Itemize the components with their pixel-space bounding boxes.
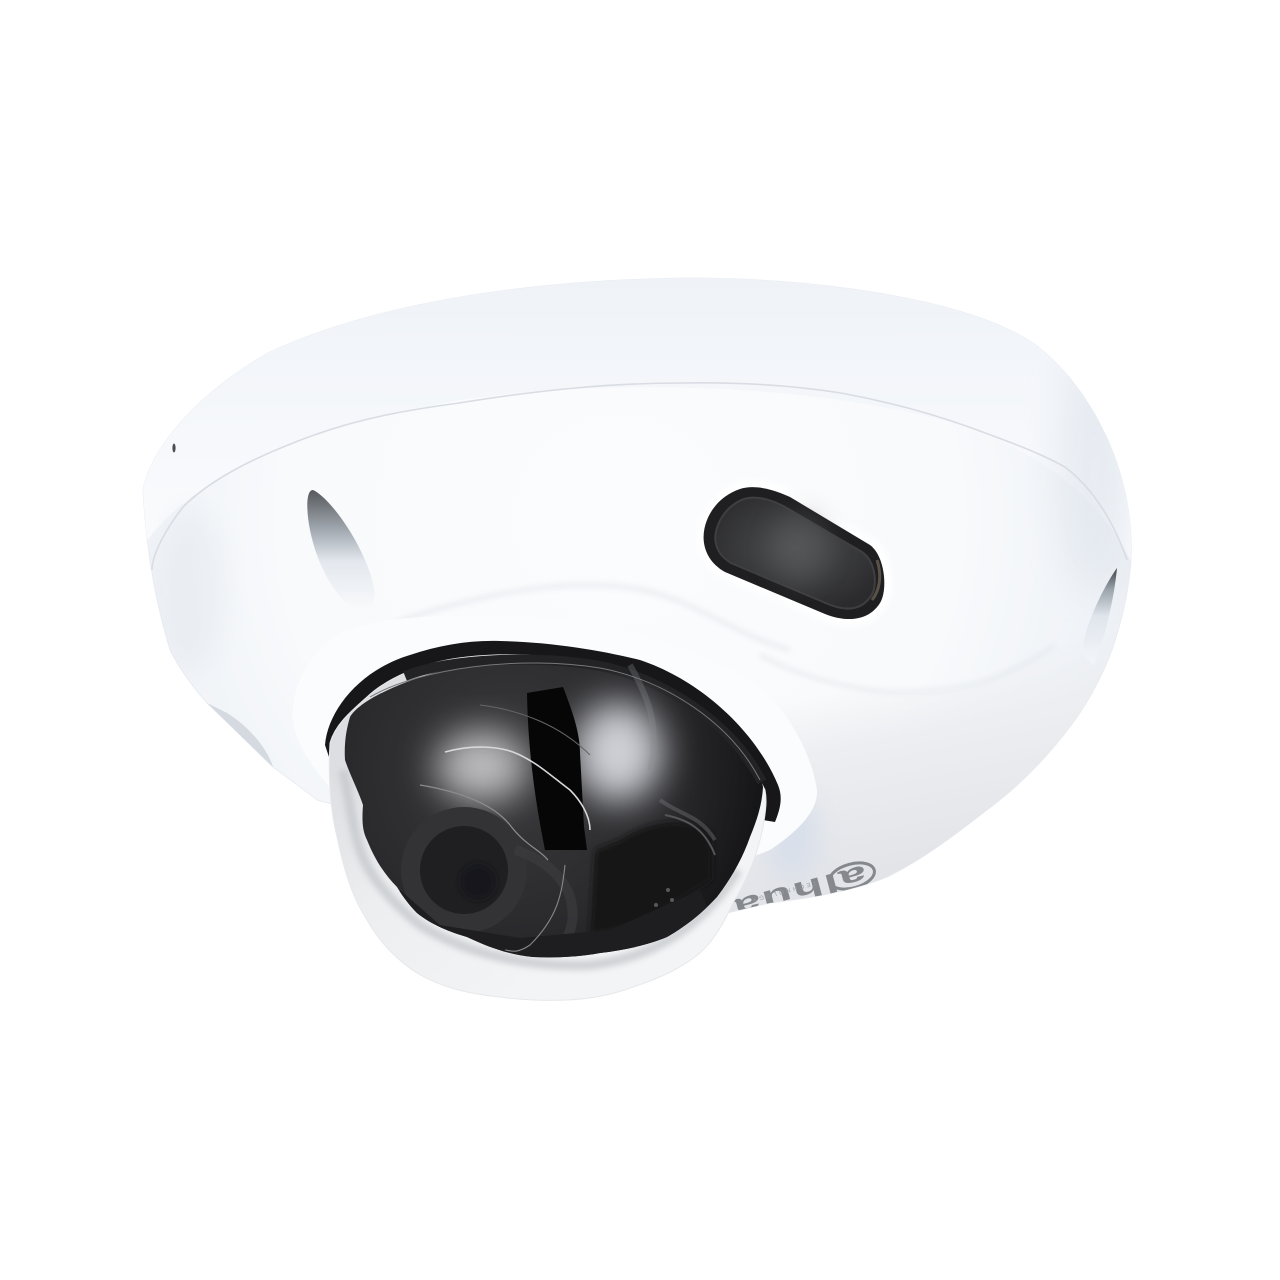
logo: TECHNOLOGY <box>752 879 817 902</box>
dark opening rim <box>325 641 781 822</box>
lower shaded band <box>729 719 1050 912</box>
vent: right <box>1083 568 1117 664</box>
translucent grey band <box>343 770 738 965</box>
clear dome <box>329 655 766 1000</box>
product photo: dome security camera <box>142 278 1132 1001</box>
lens bezel <box>293 616 817 900</box>
IR window <box>704 487 884 619</box>
housing body <box>142 278 1132 913</box>
vent: left <box>307 490 374 613</box>
seam between cover and base <box>152 383 1127 570</box>
reflections <box>436 730 528 802</box>
lens <box>401 807 573 965</box>
bottom band <box>400 890 708 958</box>
plate contour <box>395 585 1055 692</box>
outer ring <box>329 655 766 1000</box>
dark interior <box>345 663 763 957</box>
scratches <box>445 747 590 830</box>
small pinhole <box>172 444 176 452</box>
black stripe <box>527 687 587 850</box>
logo: alhua <box>729 859 870 923</box>
dome top edge <box>405 660 762 782</box>
module detail <box>590 822 712 935</box>
vent: lower left <box>207 703 273 767</box>
camera <box>120 260 1180 1000</box>
